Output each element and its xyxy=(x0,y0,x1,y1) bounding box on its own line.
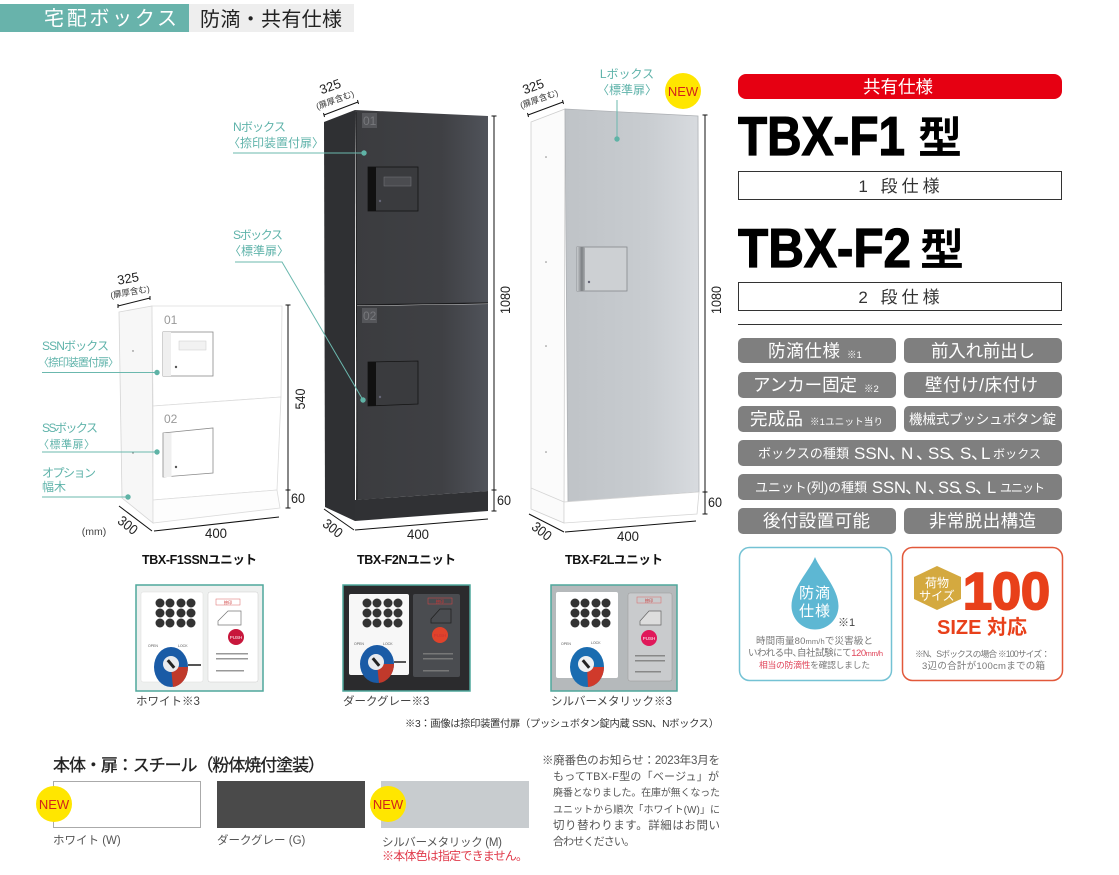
photo: white keypad lock: 捺印 xyxy=(224,599,232,605)
feature: unit types: ユニット xyxy=(1000,481,1045,495)
product: white unit TBX-F1SSN: 02 xyxy=(164,412,178,426)
photo: dark grey keypad lock: 捺印 xyxy=(436,598,444,604)
callout: optional plinth xyxy=(42,466,131,500)
notice: discontinued colour xyxy=(542,753,720,848)
callout: S box xyxy=(229,228,366,403)
model name: TBX-F2: TBX-F2 xyxy=(738,217,911,279)
feature: unit types: SS xyxy=(938,479,960,497)
unit name: TBX-F1SSN: TBX-F1SSNユニット xyxy=(142,553,257,567)
dimensions: white unit: 300 xyxy=(115,512,141,538)
feature: box types: SS xyxy=(928,444,951,463)
icon: parcel hexagon: サイズ xyxy=(919,588,955,603)
feature: box types xyxy=(738,440,1062,466)
card: drip-proof: いわれる中､自社試験にて120mm/h xyxy=(748,647,883,659)
swatch: silver metallic: NEW xyxy=(373,797,404,812)
notice: discontinued colour: ユニットから順次「ホワイト(W)」に xyxy=(553,803,720,816)
dimensions: dark unit: 1080 xyxy=(497,286,513,314)
photo: silver metallic keypad lock: 捺印 xyxy=(645,597,653,603)
swatch: silver metallic: シルバーメタリック (M) xyxy=(382,836,502,849)
callout: SS box: SSボックス xyxy=(42,421,98,435)
photo: white keypad lock: PUSH xyxy=(230,635,242,640)
dimensions: silver unit xyxy=(519,76,724,544)
notice: discontinued colour: もってTBX-F型の「ベージュ」が xyxy=(553,769,719,783)
dimensions: silver unit: 325 xyxy=(520,76,546,97)
callout: L box: 〈標準扉〉 xyxy=(597,82,657,97)
label: two tiers: 2 段仕様 xyxy=(858,288,944,307)
dimensions: white unit: (扉厚含む) xyxy=(110,284,151,300)
dimensions: dark unit: 60 xyxy=(497,492,511,508)
feature: front loading: 前入れ前出し xyxy=(931,341,1035,361)
card: drip-proof: 時間雨量80mm/hで災害級と xyxy=(756,635,873,647)
feature: box types: S xyxy=(960,444,971,463)
photo: white keypad lock xyxy=(136,585,263,691)
feature: mechanical push button lock xyxy=(904,406,1062,432)
unit name: TBX-F2N: TBX-F2Nユニット xyxy=(357,553,456,567)
badge: NEW on L box xyxy=(665,73,701,109)
card: size 100: ※N、Sボックスの場合 ※100サイズ： xyxy=(915,648,1050,659)
header: category tab xyxy=(0,4,189,32)
photo: dark grey keypad lock: PUSH xyxy=(434,633,446,638)
card: size 100 xyxy=(902,548,1062,680)
swatch: dark grey xyxy=(217,781,365,847)
photo: silver metallic keypad lock: LOCK xyxy=(591,641,601,645)
swatch: white xyxy=(36,782,200,847)
feature: complete product: ※1ユニット当り xyxy=(810,416,883,428)
model name: TBX-F2: 型 xyxy=(920,226,964,275)
photo: dark grey keypad lock: LOCK xyxy=(383,642,393,646)
card: size 100: SIZE 対応 xyxy=(937,616,1027,639)
label: two tiers xyxy=(738,282,1062,310)
photo: white keypad lock: OPEN xyxy=(148,644,158,648)
icon: parcel hexagon xyxy=(914,566,961,610)
feature: unit types: 、 xyxy=(975,479,992,497)
dimensions: silver unit: (扉厚含む) xyxy=(519,87,559,110)
feature: anchor: アンカー固定 xyxy=(753,375,857,395)
feature: unit types: 、 xyxy=(928,479,944,497)
feature: anchor: ※2 xyxy=(864,384,879,395)
model name: TBX-F1: 型 xyxy=(918,114,962,163)
feature: box types: 、 xyxy=(948,444,965,463)
dimensions: dark unit: (扉厚含む) xyxy=(315,88,355,111)
dimensions: dark unit: 400 xyxy=(407,526,429,542)
feature: retrofit: 後付設置可能 xyxy=(763,511,870,531)
callout: optional plinth: 幅木 xyxy=(42,479,66,494)
feature: drip-proof: ※1 xyxy=(847,350,862,361)
card: drip-proof: ※1 xyxy=(838,617,855,629)
card: size 100: 100 xyxy=(963,563,1050,621)
callout: SS box xyxy=(38,421,160,455)
header: specification tab: 防滴・共有仕様 xyxy=(200,8,342,31)
feature: box types: 、 xyxy=(889,444,906,463)
dimensions: dark unit: 300 xyxy=(320,515,346,541)
feature: wall and floor mount: 壁付け/床付け xyxy=(925,375,1038,395)
feature: unit types: 、 xyxy=(956,479,972,497)
dimensions: dark unit xyxy=(315,76,513,542)
swatch: silver metallic xyxy=(370,781,529,863)
photo: silver metallic keypad lock: OPEN xyxy=(561,642,571,646)
feature: box types: SSN xyxy=(854,444,889,463)
swatch: white: ホワイト (W) xyxy=(53,834,121,847)
caption: silver photo: シルバーメタリック※3 xyxy=(551,695,672,708)
feature: anchor xyxy=(738,372,896,398)
callout: L box: Lボックス xyxy=(600,67,654,81)
feature: complete product: 完成品 xyxy=(750,409,803,429)
icon: parcel hexagon: 荷物 xyxy=(925,576,949,590)
product: dark grey unit TBX-F2N xyxy=(324,110,488,521)
callout: SSN box: SSNボックス xyxy=(42,339,109,353)
notice: discontinued colour: ※廃番色のお知らせ：2023年3月を xyxy=(542,753,720,767)
unit name: TBX-F2L: TBX-F2Lユニット xyxy=(565,553,663,567)
swatch: dark grey: ダークグレー (G) xyxy=(217,833,306,847)
dimensions: white unit: (mm) xyxy=(82,526,106,538)
feature: wall and floor mount xyxy=(904,372,1062,398)
callout: N box: 〈捺印装置付扉〉 xyxy=(228,136,324,150)
feature: emergency escape: 非常脱出構造 xyxy=(929,511,1036,531)
feature: box types: ボックス xyxy=(993,447,1041,461)
photo: silver metallic keypad lock: PUSH xyxy=(643,636,655,641)
feature: box types: 、 xyxy=(916,444,933,463)
dimensions: white unit: 540 xyxy=(292,388,308,410)
feature: drip-proof xyxy=(738,338,896,363)
icon: water drop: 防滴 xyxy=(799,585,831,602)
notice: discontinued colour: 切り替わります。詳細はお問い xyxy=(553,818,720,832)
feature: front loading xyxy=(904,338,1062,363)
label: one tier xyxy=(738,172,1062,200)
feature: unit types: N xyxy=(915,479,927,497)
notice: discontinued colour: 合わせください。 xyxy=(553,835,635,848)
feature: retrofit xyxy=(738,508,896,534)
dimensions: dark unit: 325 xyxy=(317,76,343,97)
icon: water drop xyxy=(792,557,838,630)
callout: N box xyxy=(228,120,367,156)
dimensions: white unit: 60 xyxy=(291,490,305,506)
label: one tier: 1 段仕様 xyxy=(858,177,944,196)
dimensions: white unit xyxy=(82,269,308,541)
header: specification tab xyxy=(189,4,354,32)
card: drip-proof: 相当の防滴性を確認しました xyxy=(759,659,870,670)
banner: shared specification xyxy=(738,74,1062,99)
feature: mechanical push button lock: 機械式プッシュボタン錠 xyxy=(909,412,1056,427)
caption: dark grey photo: ダークグレー※3 xyxy=(343,694,429,708)
callout: SS box: 〈標準扉〉 xyxy=(38,437,95,451)
photo: dark grey keypad lock: OPEN xyxy=(354,642,364,646)
badge: NEW on L box: NEW xyxy=(668,84,699,99)
callout: SSN box: 〈捺印装置付扉〉 xyxy=(38,355,119,369)
product: dark grey unit TBX-F2N: 01 xyxy=(363,114,377,128)
feature: box types: ボックスの種類 xyxy=(758,446,849,461)
card: size 100: 3辺の合計が100cmまでの箱 xyxy=(922,660,1045,672)
heading: material: 本体・扉：スチール（粉体焼付塗装） xyxy=(53,756,325,775)
callout: L box xyxy=(597,67,657,142)
product: dark grey unit TBX-F2N: 02 xyxy=(363,309,377,323)
feature: unit types: S xyxy=(965,479,976,497)
feature: unit types: SSN xyxy=(872,479,906,497)
model name: TBX-F1: TBX-F1 xyxy=(738,105,905,167)
photo: silver metallic keypad lock xyxy=(551,585,677,691)
swatch: white: NEW xyxy=(39,797,70,812)
feature: unit types: ユニット(列)の種類 xyxy=(755,480,867,495)
feature: emergency escape xyxy=(904,508,1062,534)
callout: S box: Sボックス xyxy=(233,228,283,242)
caption: white photo: ホワイト※3 xyxy=(136,695,200,708)
dimensions: silver unit: 1080 xyxy=(708,286,724,314)
feature: unit types: L xyxy=(987,479,996,497)
photo: white keypad lock: LOCK xyxy=(178,644,188,648)
product: white unit TBX-F1SSN: 01 xyxy=(164,313,178,327)
header: category tab: 宅配ボックス xyxy=(44,7,177,30)
dimensions: silver unit: 60 xyxy=(708,494,722,510)
product: silver metallic unit TBX-F2L xyxy=(531,109,699,523)
card: drip-proof xyxy=(740,548,892,680)
feature: complete product xyxy=(738,406,896,432)
callout: S box: 〈標準扉〉 xyxy=(229,243,289,258)
callout: optional plinth: オプション xyxy=(42,466,96,480)
product: white unit TBX-F1SSN xyxy=(119,306,282,523)
feature: box types: 、 xyxy=(971,444,988,463)
notice: discontinued colour: 廃番となりました。在庫が無くなった xyxy=(553,786,720,799)
icon: water drop: 仕様 xyxy=(799,603,831,620)
swatch: silver metallic: ※本体色は指定できません。 xyxy=(382,848,528,863)
callout: SSN box xyxy=(38,339,160,375)
feature: drip-proof: 防滴仕様 xyxy=(768,341,840,361)
callout: N box: Nボックス xyxy=(233,120,286,134)
dimensions: silver unit: 400 xyxy=(617,528,639,544)
feature: unit types xyxy=(738,474,1062,500)
photo: dark grey keypad lock xyxy=(343,585,470,691)
dimensions: silver unit: 300 xyxy=(529,518,555,544)
feature: box types: N xyxy=(901,444,913,463)
feature: unit types: 、 xyxy=(905,479,922,497)
banner: shared specification: 共有仕様 xyxy=(863,77,933,97)
dimensions: white unit: 400 xyxy=(205,525,227,541)
footnote: image note: ※3：画像は捺印装置付扉（プッシュボタン錠内蔵 SSN、Nボックス） xyxy=(405,717,719,730)
feature: box types: L xyxy=(981,444,990,463)
dimensions: white unit: 325 xyxy=(116,269,140,288)
